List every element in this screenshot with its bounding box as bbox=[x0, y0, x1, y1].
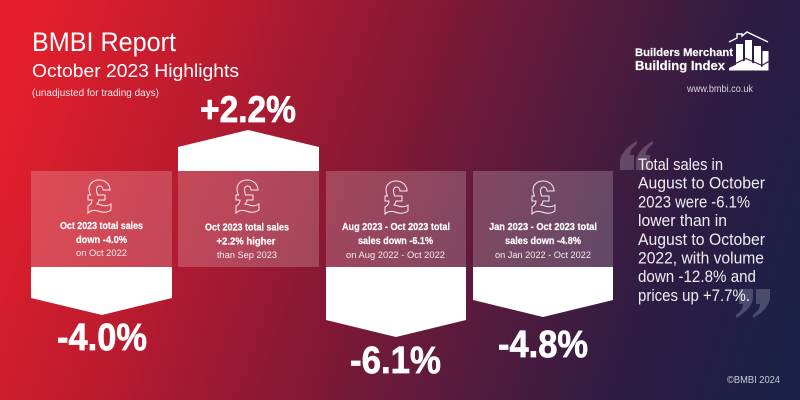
panel text: sales down -4.8% bbox=[505, 236, 581, 247]
panel text: on Aug 2022 - Oct 2022 bbox=[346, 250, 445, 260]
text block: quote: 2023 were -6.1% bbox=[638, 193, 750, 211]
logo bbox=[635, 32, 768, 73]
panel: Jan-Oct 2023 bbox=[473, 171, 613, 366]
icon: closing quote mark bbox=[736, 289, 770, 318]
title: BMBI Report bbox=[32, 27, 176, 57]
icon: pound bbox=[236, 180, 259, 213]
website: www.bmbi.co.uk bbox=[686, 84, 754, 95]
icon: pound bbox=[385, 181, 408, 214]
icon: opening quote mark bbox=[620, 141, 653, 170]
panel text bbox=[205, 222, 289, 260]
panel text: Aug 2023 - Oct 2023 total bbox=[342, 222, 450, 233]
panel: Oct 2023 monthly bbox=[178, 89, 319, 267]
text block: quote: lower than in bbox=[638, 212, 727, 230]
heading block bbox=[32, 27, 239, 99]
panel text: +2.2% higher bbox=[216, 236, 276, 248]
logo: Builders Merchant bbox=[635, 47, 733, 59]
text block: quote: August to October bbox=[638, 231, 765, 249]
panel text: on Oct 2022 bbox=[76, 248, 127, 258]
panel text: Oct 2023 total sales bbox=[205, 222, 289, 234]
text block: quote: August to October bbox=[638, 175, 765, 193]
arrow: up bbox=[178, 130, 319, 171]
panel text: down -4.0% bbox=[76, 235, 127, 246]
text block: quote bbox=[638, 156, 765, 305]
text block: quote: Total sales in bbox=[638, 156, 723, 174]
panel text: Oct 2023 total sales bbox=[60, 221, 143, 232]
icon: pound bbox=[532, 181, 555, 214]
panel text: than Sep 2023 bbox=[217, 250, 277, 260]
panel text: on Jan 2022 - Oct 2022 bbox=[495, 250, 591, 260]
panel: Oct 2023 annual bbox=[31, 171, 172, 359]
arrow: down bbox=[31, 267, 172, 315]
note: (unadjusted for trading days) bbox=[32, 88, 159, 99]
value: +2.2% bbox=[200, 89, 296, 130]
value: -4.0% bbox=[57, 317, 147, 359]
panel text: sales down -6.1% bbox=[358, 236, 433, 247]
arrow: down bbox=[473, 267, 613, 317]
text block: quote: prices up +7.7%. bbox=[638, 287, 750, 305]
value: -4.8% bbox=[498, 324, 588, 366]
icon: pound bbox=[88, 180, 111, 213]
arrow: down bbox=[326, 267, 466, 337]
panel text bbox=[342, 222, 450, 260]
text block: quote: 2022, with volume bbox=[638, 250, 764, 268]
text block: quote: down -12.8% and bbox=[638, 268, 756, 286]
panel: Aug-Oct 2023 bbox=[326, 171, 466, 382]
subtitle: October 2023 Highlights bbox=[32, 60, 239, 81]
copyright: ©BMBI 2024 bbox=[727, 375, 780, 386]
panel text bbox=[489, 222, 597, 260]
value: -6.1% bbox=[350, 340, 441, 382]
icon: house and buildings bbox=[729, 32, 768, 70]
panel text: Jan 2023 - Oct 2023 total bbox=[489, 222, 597, 233]
logo: Building Index bbox=[635, 58, 726, 73]
panel text bbox=[60, 221, 143, 258]
